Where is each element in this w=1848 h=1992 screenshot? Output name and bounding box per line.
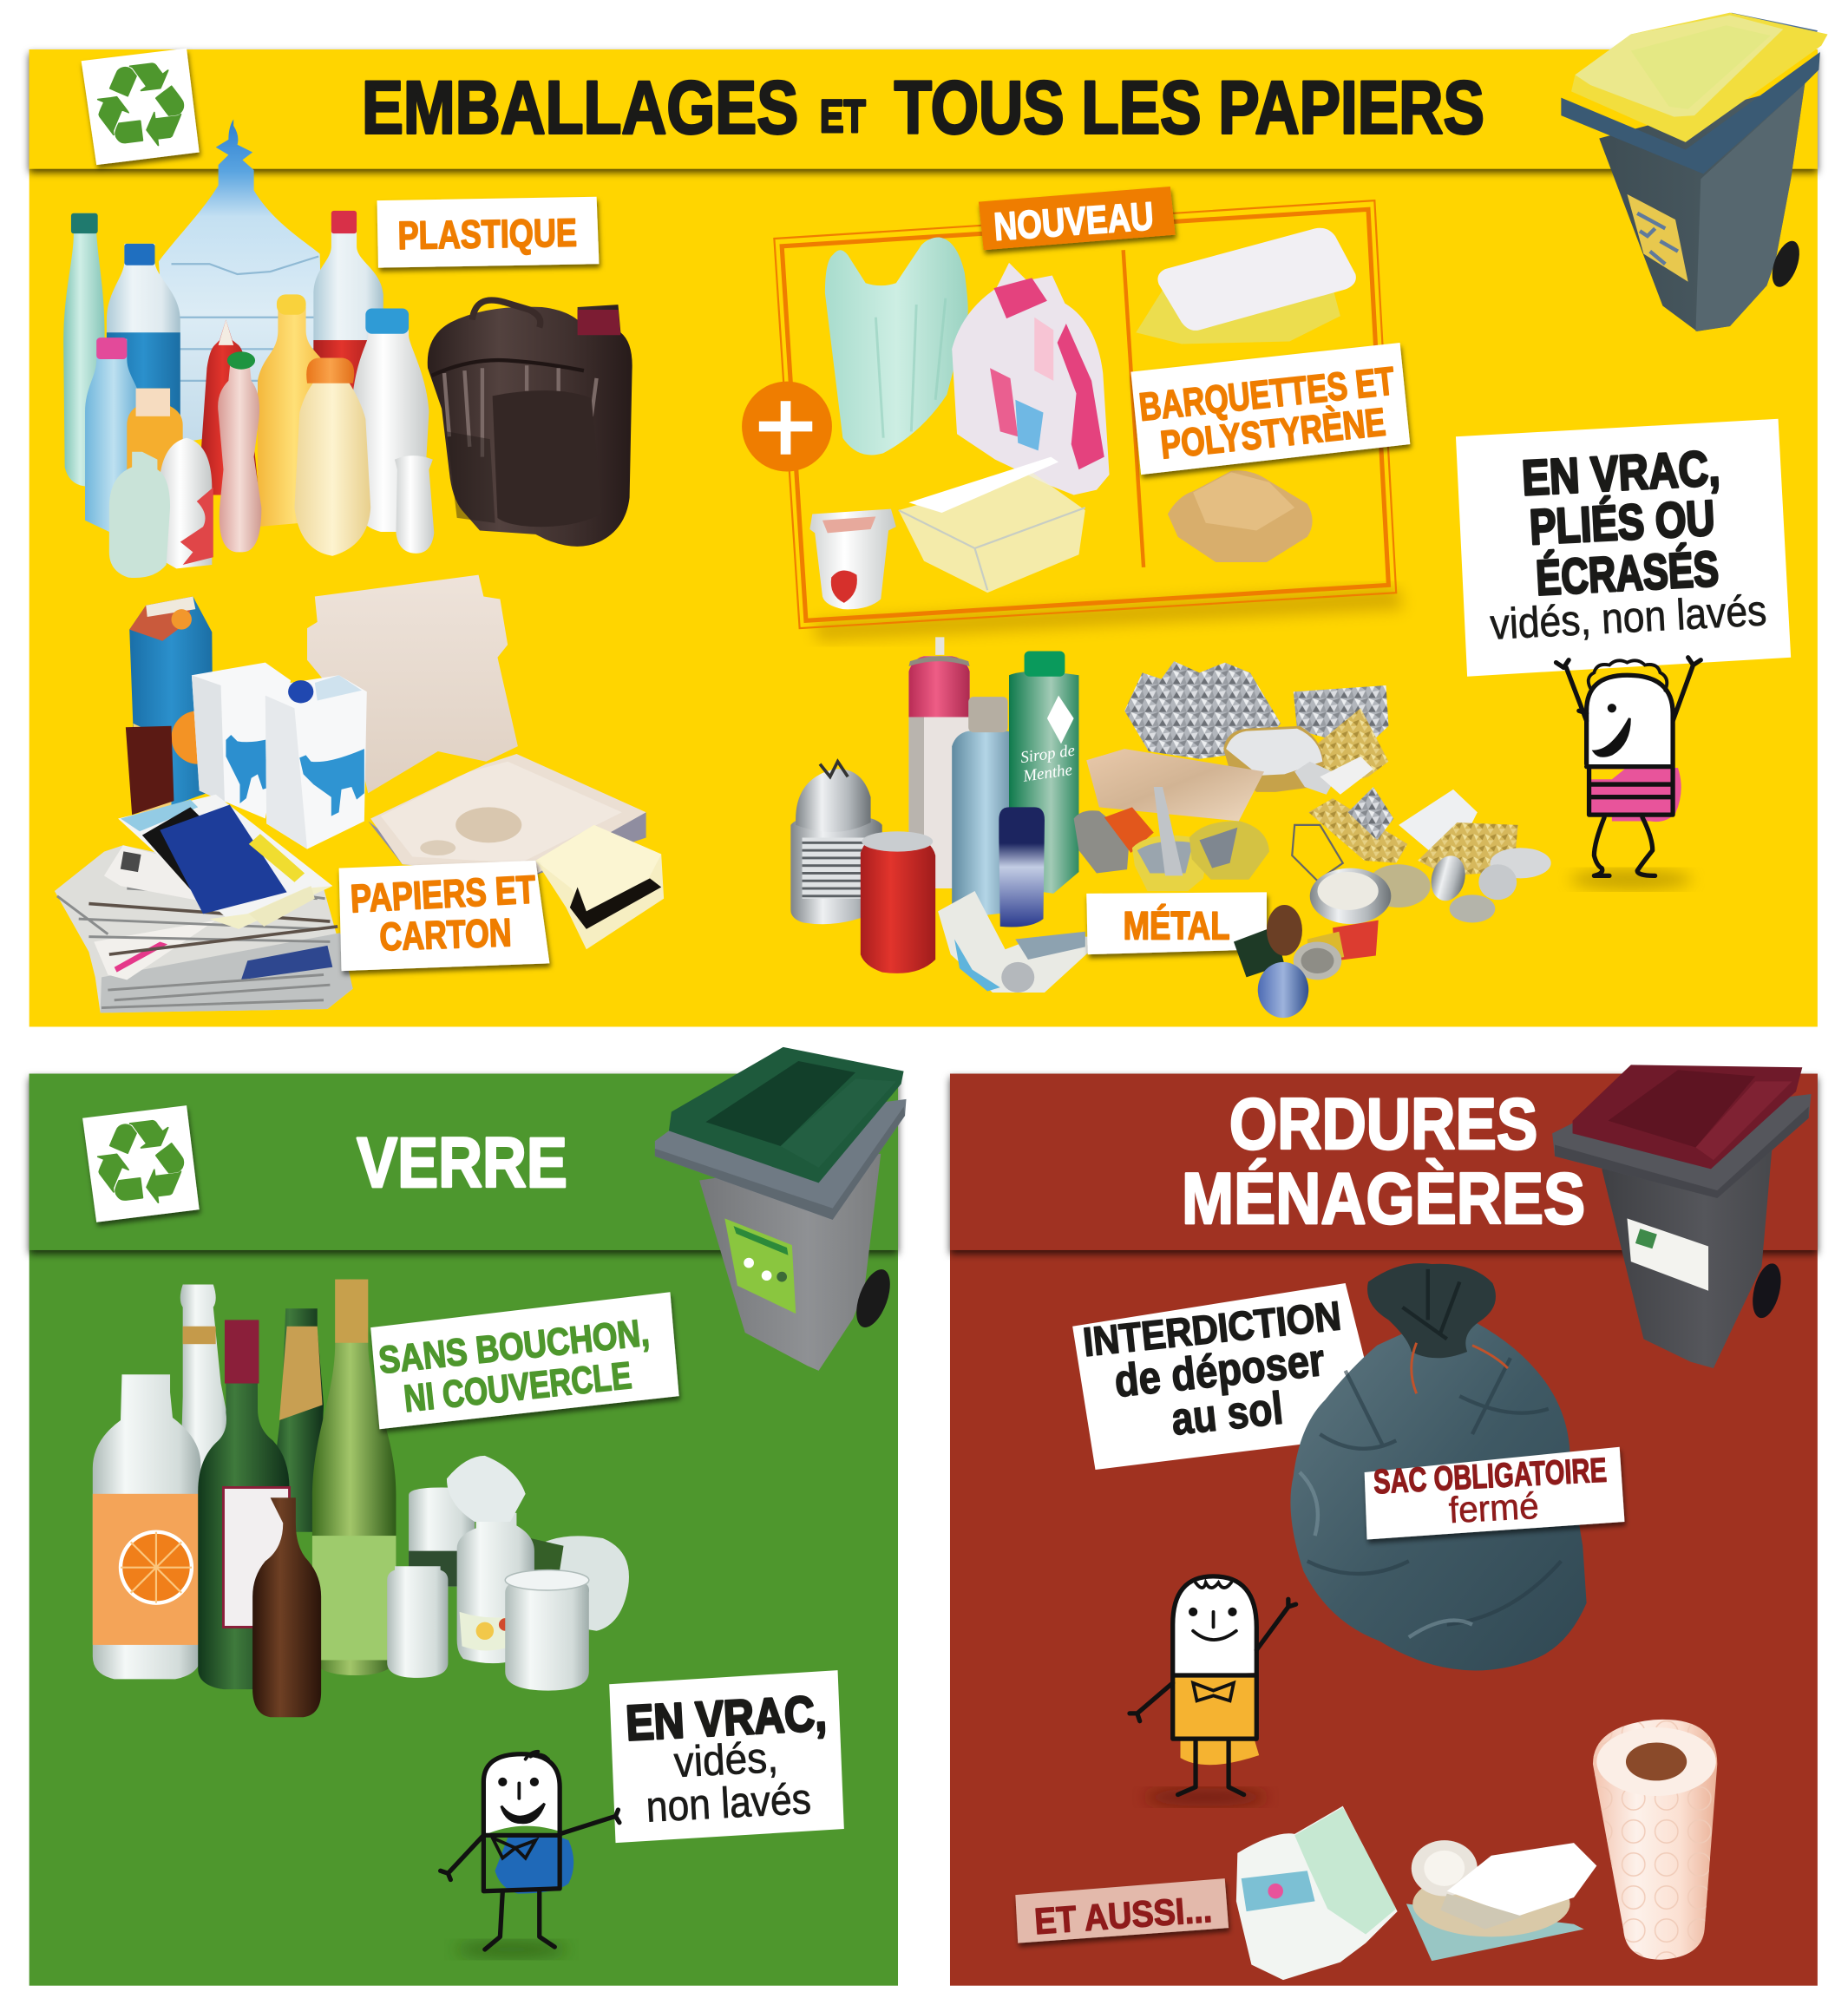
plastic canister [428, 300, 632, 547]
header band: green [29, 1074, 898, 1250]
label: barquettes et polystyrene: BARQUETTES ET [1137, 358, 1397, 429]
label: en vrac verre [609, 1670, 844, 1843]
bin: green lid [655, 1047, 907, 1371]
label: interdiction: INTERDICTION [1081, 1293, 1343, 1365]
metal coffee capsules [1234, 905, 1379, 1018]
plastic bottles [63, 120, 434, 578]
label: en vrac verre: EN VRAC, [625, 1686, 828, 1752]
icon: recycling card green: ♻ [81, 1091, 201, 1238]
character: red panel mascot [1130, 1576, 1296, 1806]
title: ET [820, 91, 866, 142]
yogurt pot [809, 509, 896, 609]
heading: ordures menageres [1182, 1084, 1585, 1239]
label: interdiction [1072, 1283, 1384, 1470]
label: et aussi: ET AUSSI... [1033, 1889, 1213, 1942]
label: en vrac plies ou ecrases: ÉCRASÉS [1535, 541, 1720, 606]
plastic bags [825, 238, 1110, 495]
header band: yellow [29, 49, 1818, 169]
heading: ordures menageres: ORDURES [1229, 1084, 1537, 1164]
panel: nouveau frame [742, 187, 1410, 641]
label: interdiction: au sol [1169, 1383, 1286, 1445]
label: plastique: PLASTIQUE [397, 210, 577, 258]
title [362, 67, 1484, 150]
newspaper stack [55, 795, 353, 1012]
paper towel roll [1593, 1720, 1717, 1960]
glass bottles [93, 1280, 396, 1717]
metal cans and aerosols: Sirop de [1019, 742, 1076, 767]
label: sac obligatoire [1365, 1447, 1625, 1539]
header band: red [950, 1074, 1818, 1250]
tag: nouveau: NOUVEAU [993, 193, 1155, 249]
title: TOUS LES PAPIERS [895, 67, 1484, 150]
label: papiers et carton: CARTON [379, 910, 512, 959]
label: en vrac plies ou ecrases: vidés, non lavés [1489, 586, 1768, 649]
label: metal: MÉTAL [1124, 904, 1230, 948]
foam trays [1136, 228, 1356, 344]
label: sans bouchon ni couvercle [370, 1292, 679, 1429]
label: sac obligatoire: fermé [1448, 1485, 1540, 1530]
icon: plus circle [742, 382, 832, 471]
label: papiers et carton: PAPIERS ET [350, 867, 537, 921]
label: sac obligatoire: SAC OBLIGATOIRE [1373, 1451, 1608, 1502]
heading: verre: VERRE [357, 1124, 567, 1202]
title: EMBALLAGES [362, 67, 798, 150]
label: sans bouchon ni couvercle: NI COUVERCLE [402, 1354, 633, 1420]
label: plastique [377, 197, 600, 268]
label: barquettes et polystyrene: POLYSTYRÈNE [1158, 399, 1387, 467]
label: en vrac verre: non lavés [645, 1774, 812, 1831]
label: papiers et carton [339, 861, 549, 971]
paper and carton items [126, 575, 646, 875]
label: interdiction: de déposer [1112, 1334, 1327, 1407]
diaper [1236, 1806, 1398, 1980]
bin: red lid [1552, 1065, 1812, 1368]
metal cans and aerosols [790, 637, 1089, 993]
label: en vrac plies ou ecrases: EN VRAC, [1521, 441, 1721, 507]
burger box [535, 825, 664, 949]
metal foil and trays [1074, 661, 1551, 924]
panel: verre [29, 1047, 907, 1986]
label: metal [1086, 892, 1267, 954]
panel: ordures menageres [950, 1065, 1818, 1986]
label: en vrac plies ou ecrases [1456, 419, 1791, 677]
foam box [1168, 470, 1313, 562]
character: yellow panel mascot [1556, 658, 1701, 889]
metal cans and aerosols: Menthe [1021, 761, 1073, 786]
garbage bag [1290, 1263, 1587, 1670]
label: en vrac verre: vidés, [672, 1733, 779, 1786]
label: barquettes et polystyrene [1130, 343, 1410, 475]
label: en vrac plies ou ecrases: PLIÉS OU [1528, 490, 1716, 555]
heading: ordures menageres: MÉNAGÈRES [1182, 1158, 1585, 1239]
glass jars [387, 1456, 629, 1691]
bin: yellow lid [1561, 13, 1828, 331]
broken plates [1406, 1840, 1596, 1961]
label: sans bouchon ni couvercle: SANS BOUCHON, [377, 1312, 652, 1382]
panel: emballages et papiers [29, 13, 1828, 1026]
icon: recycling card yellow: ♻ [81, 33, 201, 180]
character: green panel mascot [441, 1752, 619, 1958]
clear plastic box [899, 457, 1085, 593]
